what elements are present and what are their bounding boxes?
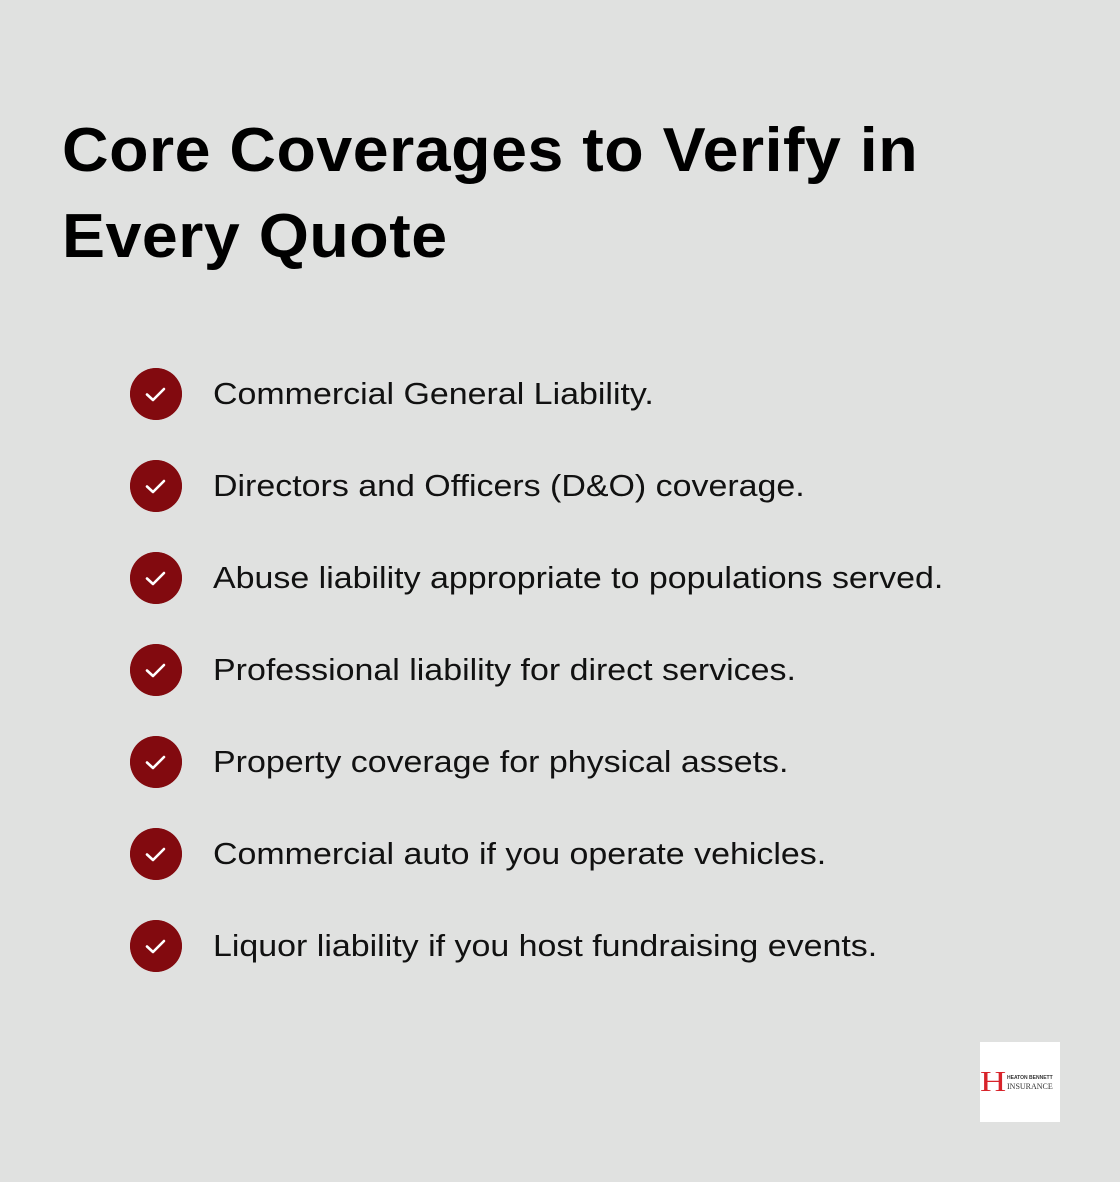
icon: check	[130, 552, 182, 604]
list item 1: Commercial General Liability.	[213, 376, 654, 411]
list item 1	[130, 368, 654, 420]
list item 5: Property coverage for physical assets.	[213, 744, 788, 779]
list item 7	[130, 920, 877, 972]
icon: check	[130, 920, 182, 972]
list item 6	[130, 828, 826, 880]
title: Every Quote	[62, 202, 448, 271]
title: Core Coverages to Verify in	[62, 116, 918, 185]
list item 3	[130, 552, 943, 604]
title	[62, 116, 918, 271]
list item 6: Commercial auto if you operate vehicles.	[213, 836, 826, 871]
icon: check	[130, 644, 182, 696]
list item 4: Professional liability for direct services.	[213, 652, 796, 687]
icon: check	[130, 828, 182, 880]
logo: HEATON BENNETT	[1007, 1075, 1053, 1081]
logo: INSURANCE	[1007, 1082, 1053, 1091]
icon: check	[130, 460, 182, 512]
list item 2	[130, 460, 805, 512]
icon: check	[130, 368, 182, 420]
list item 4	[130, 644, 796, 696]
list item 5	[130, 736, 788, 788]
list item 2: Directors and Officers (D&O) coverage.	[213, 468, 805, 503]
logo	[980, 1042, 1060, 1122]
icon: check	[130, 736, 182, 788]
list item 3: Abuse liability appropriate to populations served.	[213, 560, 943, 595]
list item 7: Liquor liability if you host fundraising events.	[213, 928, 877, 963]
logo: H	[980, 1066, 1006, 1098]
